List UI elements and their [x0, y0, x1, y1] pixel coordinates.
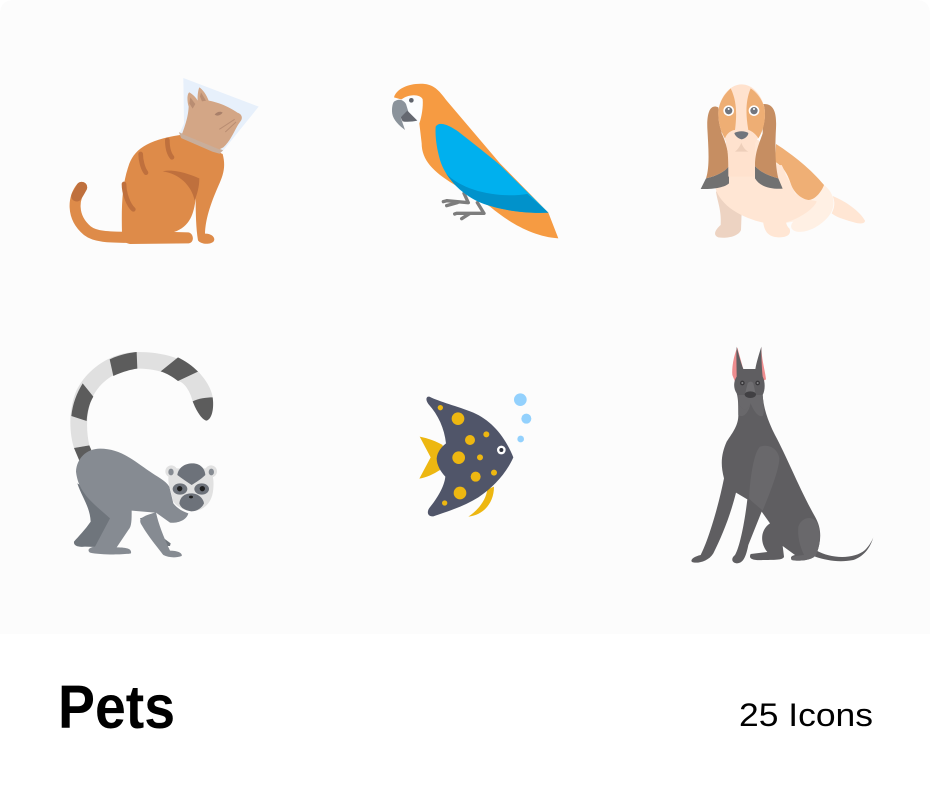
icon: ring-tailed lemur [70, 352, 217, 557]
icon: great dane [691, 347, 873, 563]
icon: angelfish with bubbles [419, 393, 531, 517]
icon: basset hound [701, 84, 865, 238]
title: Pets [58, 673, 175, 741]
icon: macaw parrot [392, 84, 558, 238]
icon: cat with cone collar [75, 78, 259, 244]
icon count label: 25 Icons [739, 697, 873, 733]
